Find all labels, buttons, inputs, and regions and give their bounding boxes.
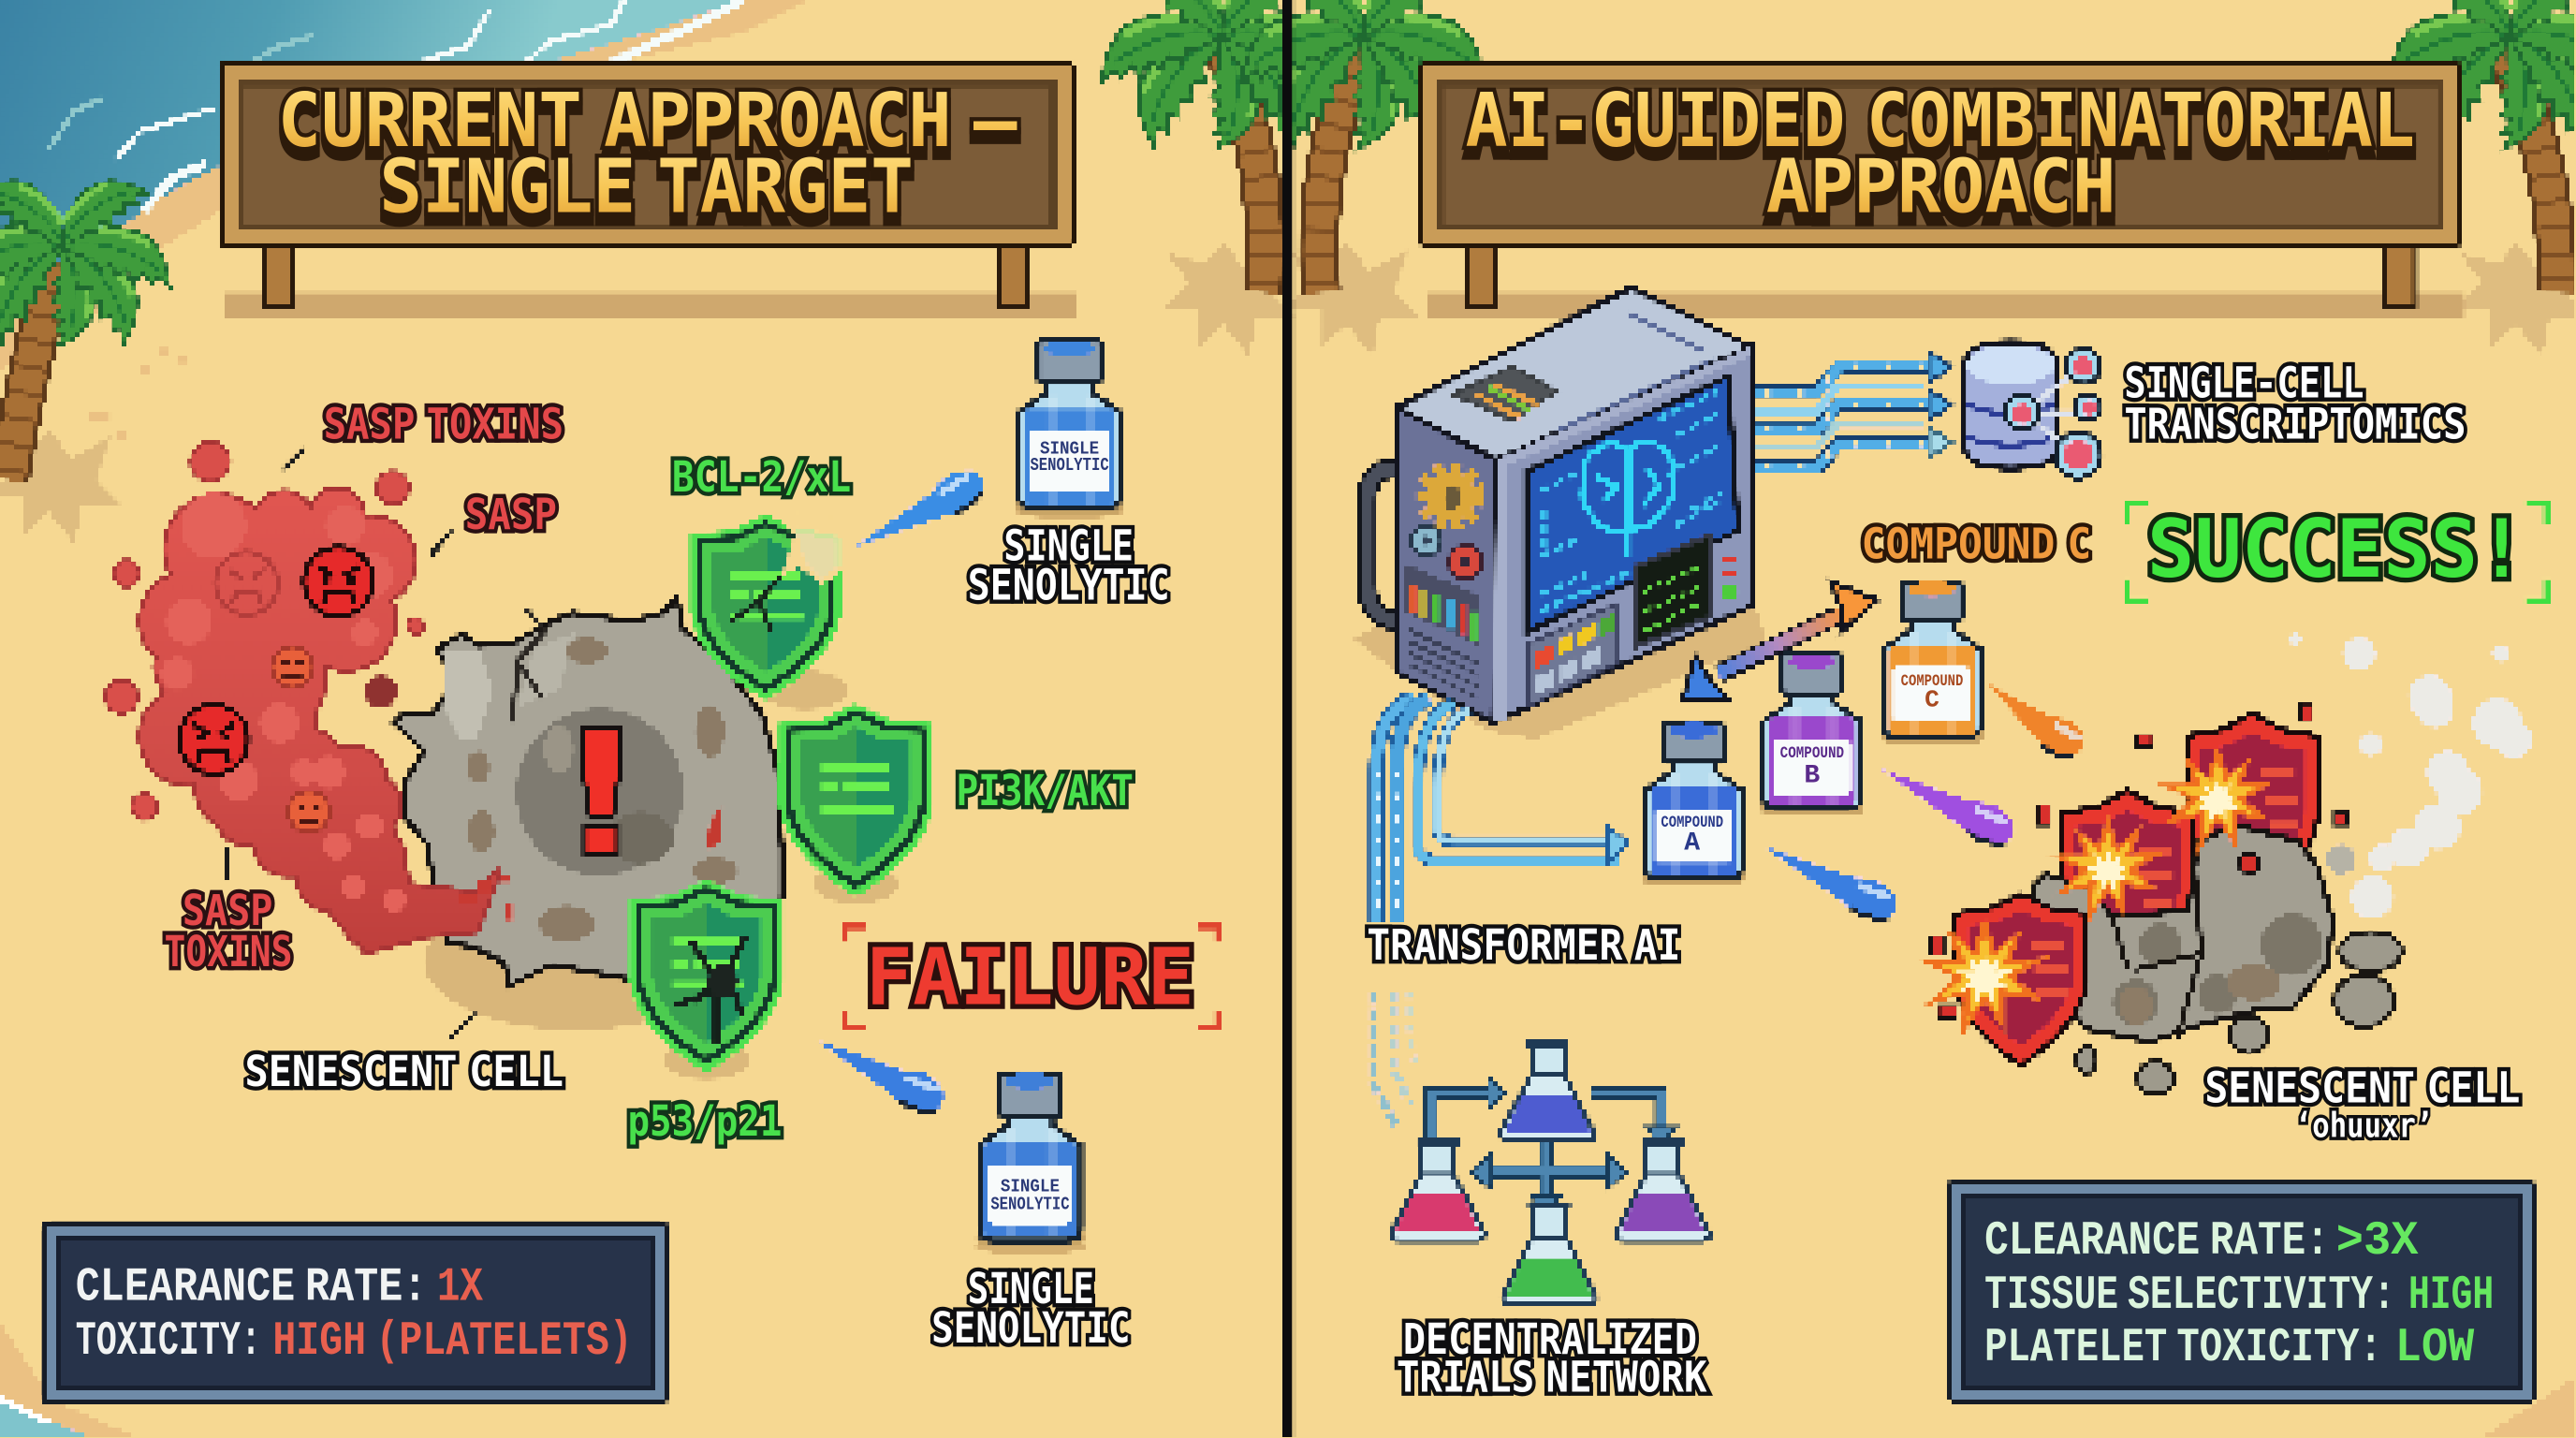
vial label: compound A: COMPOUND — [1661, 814, 1723, 832]
palm tree: left shore — [0, 161, 173, 479]
label: p53/p21: p53/p21 — [627, 1096, 782, 1146]
connected flasks network — [1391, 1038, 1709, 1303]
label: single senolytic top: SENOLYTIC — [968, 561, 1170, 610]
heading: current approach: CURRENT APPROACH – — [278, 78, 1017, 164]
heading: AI-guided combinatorial approach: AI-GUIDED COMBINATORIAL — [1466, 78, 2415, 164]
vial label: compound A: A — [1684, 829, 1700, 858]
label: SASP: SASP — [465, 490, 557, 539]
vial labels: single senolytic top — [1030, 438, 1109, 476]
senescent cell — [394, 598, 782, 1030]
vial label: compound B: COMPOUND — [1780, 744, 1844, 763]
central divider — [1281, 0, 1294, 1438]
heading: AI-guided combinatorial approach — [1466, 78, 2415, 229]
label: SASP toxins top: SASP TOXINS — [324, 400, 564, 449]
label: SASP toxins bottom: TOXINS — [165, 927, 292, 976]
drug projectile: purple — [1872, 753, 2021, 854]
destroyed senescent cell — [1916, 634, 2532, 1094]
shield: PI3K/AKT — [779, 703, 933, 903]
drug projectile: bottom — [808, 1023, 950, 1121]
label: single senolytic top: SINGLE — [1003, 521, 1134, 570]
failure corner brackets — [846, 927, 1218, 1029]
stats text: AI-guided approach: PLATELET TOXICITY: — [1984, 1322, 2382, 1375]
vial label: compound C: C — [1925, 686, 1939, 714]
stats text: current approach: TOXICITY: — [76, 1315, 261, 1369]
heading: current approach: SINGLE TARGET — [379, 143, 914, 229]
stats text: current approach — [76, 1261, 633, 1369]
icon: single-cell database — [1965, 342, 2101, 478]
vial: compound A — [1642, 723, 1746, 885]
label: senescent cell right — [2204, 1064, 2520, 1146]
label: compound C: COMPOUND C — [1862, 520, 2091, 569]
label: single-cell transcriptomics — [2124, 359, 2466, 449]
leader lines — [228, 447, 476, 1038]
label: single senolytic top — [968, 521, 1170, 610]
vial: compound B — [1761, 653, 1864, 815]
label: decentralized trials network: TRIALS NETWORK — [1397, 1353, 1707, 1402]
label: decentralized trials network — [1397, 1314, 1707, 1402]
AI computer — [1354, 287, 1766, 740]
label: SASP toxins bottom: SASP — [183, 886, 272, 935]
palm tree: centre left — [1098, 0, 1346, 292]
SASP toxin cloud — [105, 442, 513, 951]
vial label: compound C: COMPOUND — [1901, 672, 1963, 691]
label: senescent cell left: SENESCENT CELL — [245, 1047, 564, 1096]
title sign board: right — [1421, 63, 2465, 318]
vial label: compound A — [1661, 814, 1723, 858]
stats text: current approach: CLEARANCE RATE: — [76, 1261, 427, 1314]
label: PI3K/AKT: PI3K/AKT — [956, 766, 1134, 815]
vial label: compound B — [1780, 744, 1844, 790]
shield: BCL-2/xL damaged — [690, 509, 848, 710]
label: single-cell transcriptomics: SINGLE-CELL — [2124, 359, 2364, 408]
stats text: AI-guided approach: TISSUE SELECTIVITY: — [1984, 1269, 2395, 1323]
label: BCL-2/xL: BCL-2/xL — [672, 452, 851, 502]
stats text: AI-guided approach: CLEARANCE RATE: — [1984, 1215, 2330, 1269]
vial: compound C — [1881, 581, 1983, 743]
stats text: AI-guided approach — [1984, 1215, 2494, 1375]
stats text: current approach: 1X — [437, 1261, 483, 1314]
label: senescent cell right: SENESCENT CELL — [2204, 1064, 2520, 1113]
label: single senolytic bottom: SENOLYTIC — [931, 1303, 1131, 1353]
vial labels: single senolytic bottom — [990, 1176, 1070, 1215]
vial label: compound B: B — [1804, 761, 1820, 790]
palm tree: far right — [2386, 0, 2576, 292]
label: senescent cell right: ‘ohuuxr’ — [2295, 1106, 2433, 1146]
stats text: AI-guided approach: >3X — [2336, 1215, 2419, 1269]
label: single senolytic bottom — [931, 1264, 1131, 1353]
drug projectile: top — [845, 462, 991, 565]
palm tree: centre right — [1239, 0, 1487, 292]
heading: current approach — [278, 78, 1017, 229]
label: decentralized trials network: DECENTRALIZED — [1403, 1314, 1697, 1364]
label: single-cell transcriptomics: TRANSCRIPTOMICS — [2124, 400, 2466, 449]
data streams from AI to compound and trials — [1373, 698, 1630, 1125]
stats text: AI-guided approach: HIGH — [2408, 1269, 2494, 1323]
double-headed compound arrow — [1682, 581, 1878, 700]
vial: single senolytic top — [1014, 340, 1125, 520]
data streams to transcriptomics — [1753, 352, 1952, 466]
heading: AI-guided combinatorial approach: APPROACH — [1766, 143, 2116, 229]
label: transformer AI: TRANSFORMER AI — [1367, 920, 1680, 970]
shield: p53/p21 cracked — [629, 879, 783, 1079]
stats panel: left — [43, 1223, 667, 1403]
vial labels: single senolytic bottom: SENOLYTIC — [990, 1195, 1070, 1215]
vial labels: single senolytic top: SENOLYTIC — [1030, 455, 1109, 476]
drug projectile: orange — [1973, 667, 2091, 767]
callout: success: SUCCESS! — [2147, 503, 2525, 596]
stats text: current approach: HIGH (PLATELETS) — [272, 1315, 633, 1369]
label: SASP toxins bottom — [165, 886, 292, 976]
title sign board: left — [222, 63, 1076, 318]
stats panel: right — [1949, 1181, 2535, 1401]
success corner brackets — [2128, 503, 2546, 600]
label: single senolytic bottom: SINGLE — [968, 1264, 1094, 1313]
stats text: AI-guided approach: LOW — [2395, 1322, 2475, 1375]
callout: failure: FAILURE — [866, 931, 1194, 1022]
vial labels: single senolytic top: SINGLE — [1040, 438, 1099, 459]
palm tree shadows — [0, 242, 2576, 545]
vial label: compound C — [1901, 672, 1963, 714]
drug projectile: blue — [1754, 829, 1904, 929]
vial: single senolytic bottom — [974, 1073, 1086, 1255]
vial labels: single senolytic bottom: SINGLE — [1001, 1176, 1060, 1196]
